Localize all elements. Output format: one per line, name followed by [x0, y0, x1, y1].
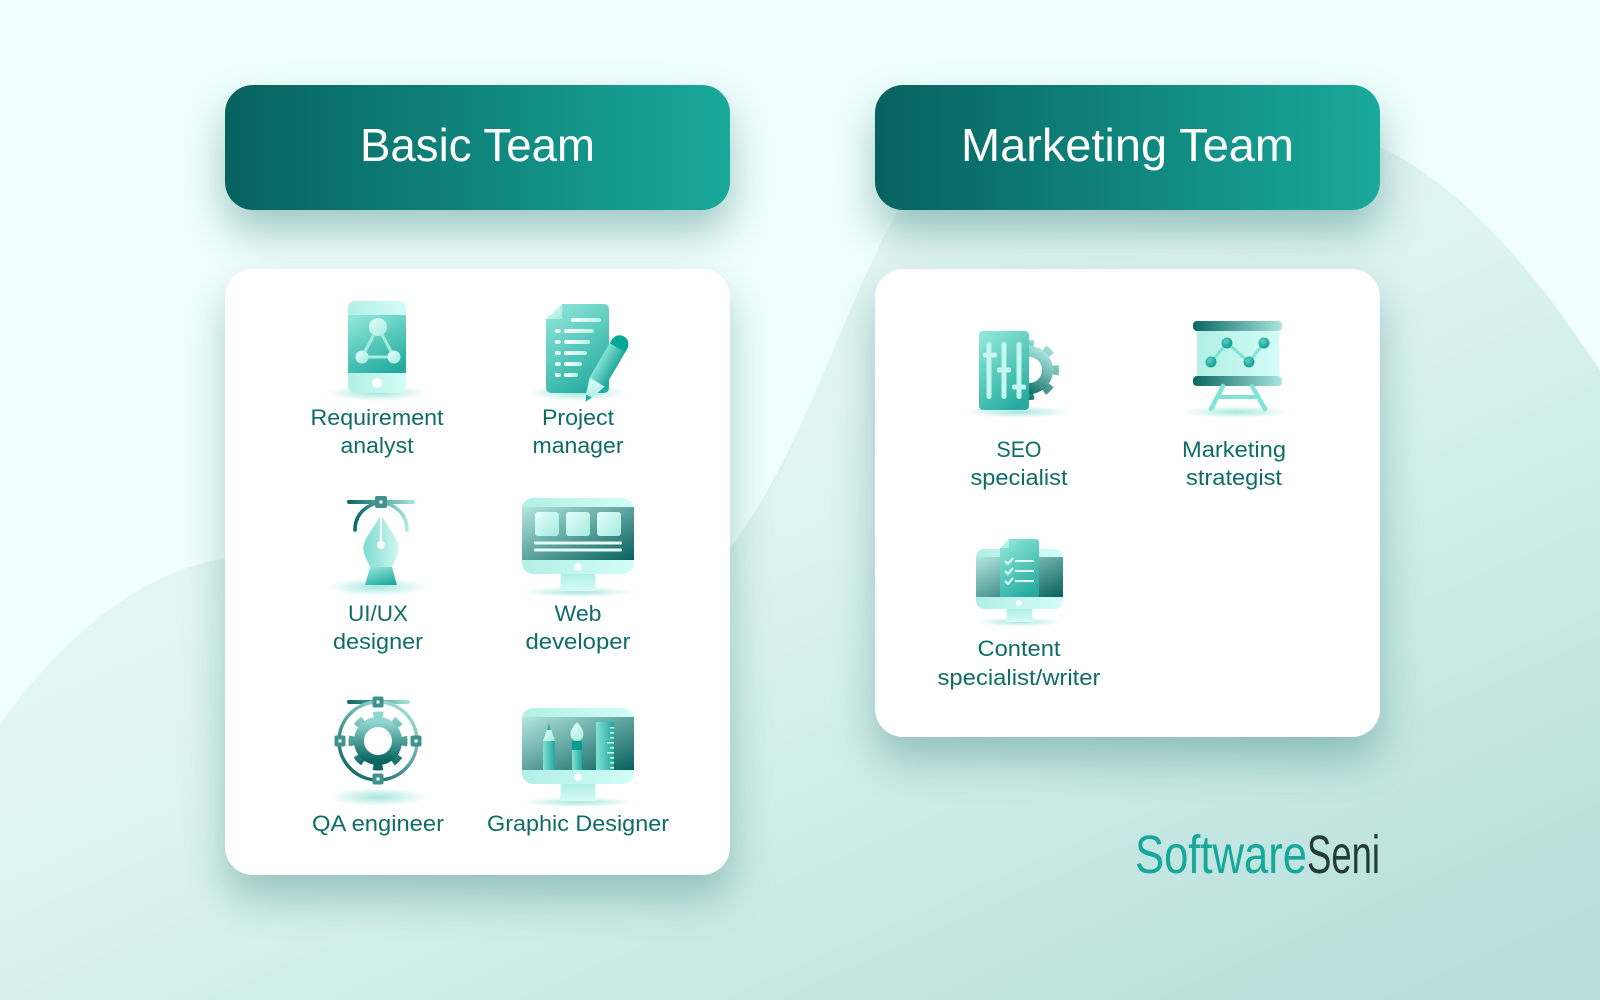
role: Content specialist/writer: Content	[978, 636, 1061, 661]
role: QA engineer: QA engineer	[312, 811, 445, 836]
role: Project manager	[528, 304, 632, 458]
heading: Marketing Team: Marketing Team	[961, 119, 1294, 171]
role: Web developer	[522, 498, 634, 654]
role: UI/UX designer: designer	[333, 629, 424, 654]
logo: SoftwareSeni: Seni	[1307, 825, 1380, 885]
role: Marketing strategist: strategist	[1186, 465, 1283, 490]
role: Marketing strategist	[1182, 321, 1290, 490]
role: SEO specialist: specialist	[970, 465, 1068, 490]
panel: basic team roles	[225, 269, 730, 875]
role: Web developer: developer	[526, 629, 631, 654]
role: Web developer: Web	[554, 601, 602, 626]
heading: Marketing Team	[875, 85, 1380, 210]
role: Requirement analyst: Requirement	[310, 405, 444, 430]
role: Graphic Designer	[487, 708, 670, 836]
logo: SoftwareSeni: Software	[1135, 825, 1307, 885]
role: Graphic Designer: Graphic Designer	[487, 811, 670, 836]
role: SEO specialist: SEO	[996, 437, 1042, 462]
heading: Basic Team: Basic Team	[360, 119, 595, 171]
role: Content specialist/writer	[938, 539, 1101, 690]
role: UI/UX designer	[327, 496, 427, 654]
role: Project manager: manager	[532, 433, 624, 458]
role: Marketing strategist: Marketing	[1182, 437, 1286, 462]
role: Project manager: Project	[542, 405, 615, 430]
role: SEO specialist	[965, 331, 1071, 490]
role: UI/UX designer: UI/UX	[348, 601, 408, 626]
panel: marketing team roles	[875, 269, 1380, 737]
role: Requirement analyst	[310, 301, 444, 458]
heading: Basic Team	[225, 85, 730, 210]
role: Content specialist/writer: specialist/writer	[938, 665, 1101, 690]
role: Requirement analyst: analyst	[340, 433, 414, 458]
role: QA engineer	[312, 696, 445, 836]
